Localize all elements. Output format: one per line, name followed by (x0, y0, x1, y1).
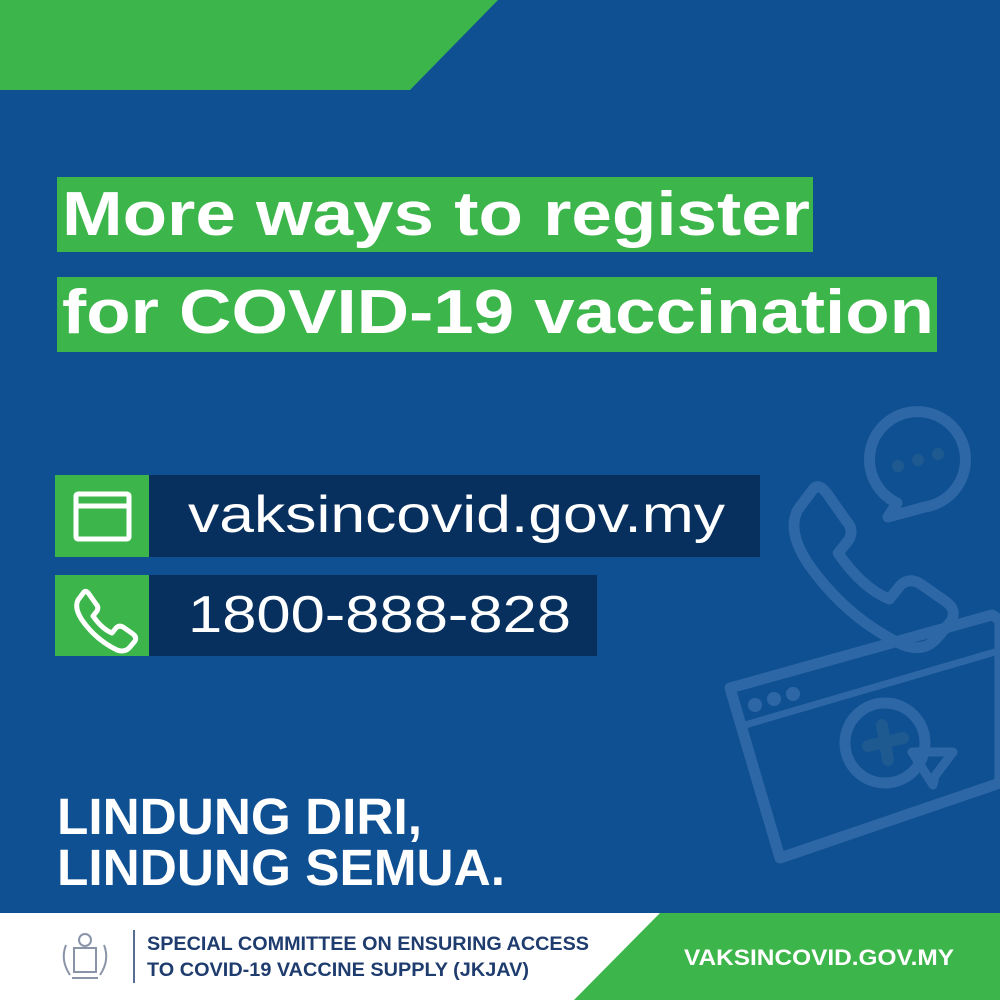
footer: TO COVID-19 VACCINE SUPPLY (JKJAV) (147, 960, 529, 981)
title: for COVID-19 vaccination (62, 278, 934, 347)
row: phone (55, 575, 597, 656)
background icon: browser window with cursor (730, 615, 1000, 858)
chat dots (892, 448, 944, 472)
title: More ways to register (62, 180, 810, 249)
title (57, 177, 937, 352)
tagline: LINDUNG DIRI, (57, 788, 422, 845)
logo: coat of arms (64, 934, 106, 978)
icon: phone (77, 591, 136, 651)
tagline: LINDUNG SEMUA. (57, 839, 505, 896)
background icon: chat bubble (869, 412, 965, 517)
footer: SPECIAL COMMITTEE ON ENSURING ACCESS (147, 934, 589, 955)
row: website (55, 475, 760, 557)
footer: VAKSINCOVID.GOV.MY (684, 945, 954, 970)
icon: browser (76, 494, 129, 539)
row: phone: 1800-888-828 (188, 586, 571, 644)
tagline (57, 788, 505, 896)
footer (0, 913, 1000, 1000)
top green banner (0, 0, 498, 90)
row: website: vaksincovid.gov.my (188, 486, 725, 544)
background icon: phone handset (794, 487, 953, 648)
